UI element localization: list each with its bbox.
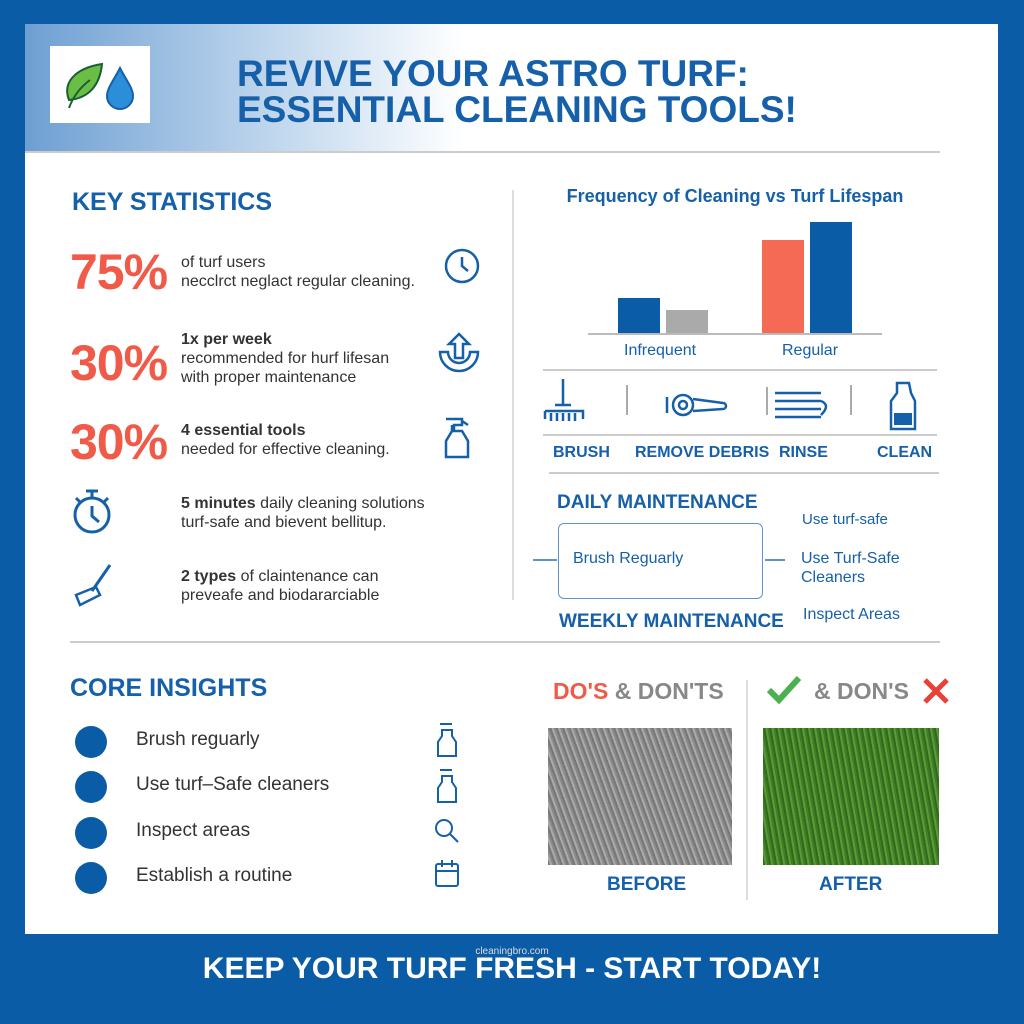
panel: core insights: CORE INSIGHTS [70, 674, 267, 702]
panel: do's & don'ts: & DON'S [814, 678, 909, 704]
panel: do's & don'ts: BEFORE [607, 874, 686, 895]
stat 75 [70, 244, 480, 300]
stat 5 min: turf-safe and bievent bellitup. [181, 514, 386, 531]
stat 30: 1x per week [181, 331, 272, 348]
tools row: BRUSH [553, 444, 610, 461]
photo: before [548, 728, 732, 865]
heading: KEY STATISTICS [72, 188, 272, 216]
stat 75: of turf users [181, 254, 265, 271]
header band [25, 24, 998, 152]
panel: core insights: Establish a routine [136, 865, 292, 886]
title [237, 53, 797, 130]
footer banner: KEEP YOUR TURF FRESH - START TODAY! [203, 952, 821, 985]
photo: after [763, 728, 939, 865]
stat 30 tools: 4 essential tools [181, 422, 306, 439]
title: ESSENTIAL CLEANING TOOLS! [237, 89, 797, 130]
tools row: REMOVE DEBRIS [635, 444, 769, 461]
maintenance: Brush Reguarly [573, 550, 683, 567]
stat 30 tools [70, 414, 470, 470]
chart [567, 186, 903, 359]
tools row [543, 379, 937, 461]
chart: Infrequent [624, 342, 696, 359]
panel: do's & don'ts [548, 676, 949, 900]
stat 30: with proper maintenance [181, 369, 356, 386]
stat 30: 30% [70, 335, 167, 391]
maintenance: DAILY MAINTENANCE [557, 492, 758, 513]
maintenance: Use Turf-Safe [801, 550, 900, 567]
maintenance: Cleaners [801, 569, 865, 586]
panel: core insights: Inspect areas [136, 820, 250, 841]
stat 75: necclrct neglact regular cleaning. [181, 273, 415, 290]
panel: key statistics [70, 188, 480, 607]
maintenance: Use turf-safe [802, 511, 888, 528]
maintenance: WEEKLY MAINTENANCE [559, 611, 784, 632]
logo [50, 46, 150, 123]
panel: do's & don'ts: AFTER [819, 874, 882, 895]
footer banner: cleaningbro.com [475, 946, 549, 957]
title: REVIVE YOUR ASTRO TURF: [237, 53, 749, 94]
stat 30: recommended for hurf lifesan [181, 350, 389, 367]
stat 30 [70, 331, 480, 391]
panel: do's & don'ts: DO'S & DON'TS [553, 678, 724, 704]
tools row: CLEAN [877, 444, 932, 461]
stat 5 min: 5 minutes daily cleaning solutions [181, 495, 425, 512]
panel: core insights: Brush reguarly [136, 729, 260, 750]
stat 30 tools: needed for effective cleaning. [181, 441, 390, 458]
stat 2 types: preveafe and biodararciable [181, 587, 379, 604]
stat 2 types: 2 types of claintenance can [181, 568, 378, 585]
stat 75: 75% [70, 244, 167, 300]
stat 2 types [74, 564, 379, 607]
stat 30 tools: 30% [70, 414, 167, 470]
maintenance [533, 492, 900, 632]
chart: Regular [782, 342, 838, 359]
tools row: RINSE [779, 444, 828, 461]
chart: Frequency of Cleaning vs Turf Lifespan [567, 186, 903, 206]
maintenance: Inspect Areas [803, 606, 900, 623]
stat 5 min [74, 490, 425, 534]
panel: core insights [70, 674, 459, 894]
panel: core insights: Use turf–Safe cleaners [136, 774, 329, 795]
